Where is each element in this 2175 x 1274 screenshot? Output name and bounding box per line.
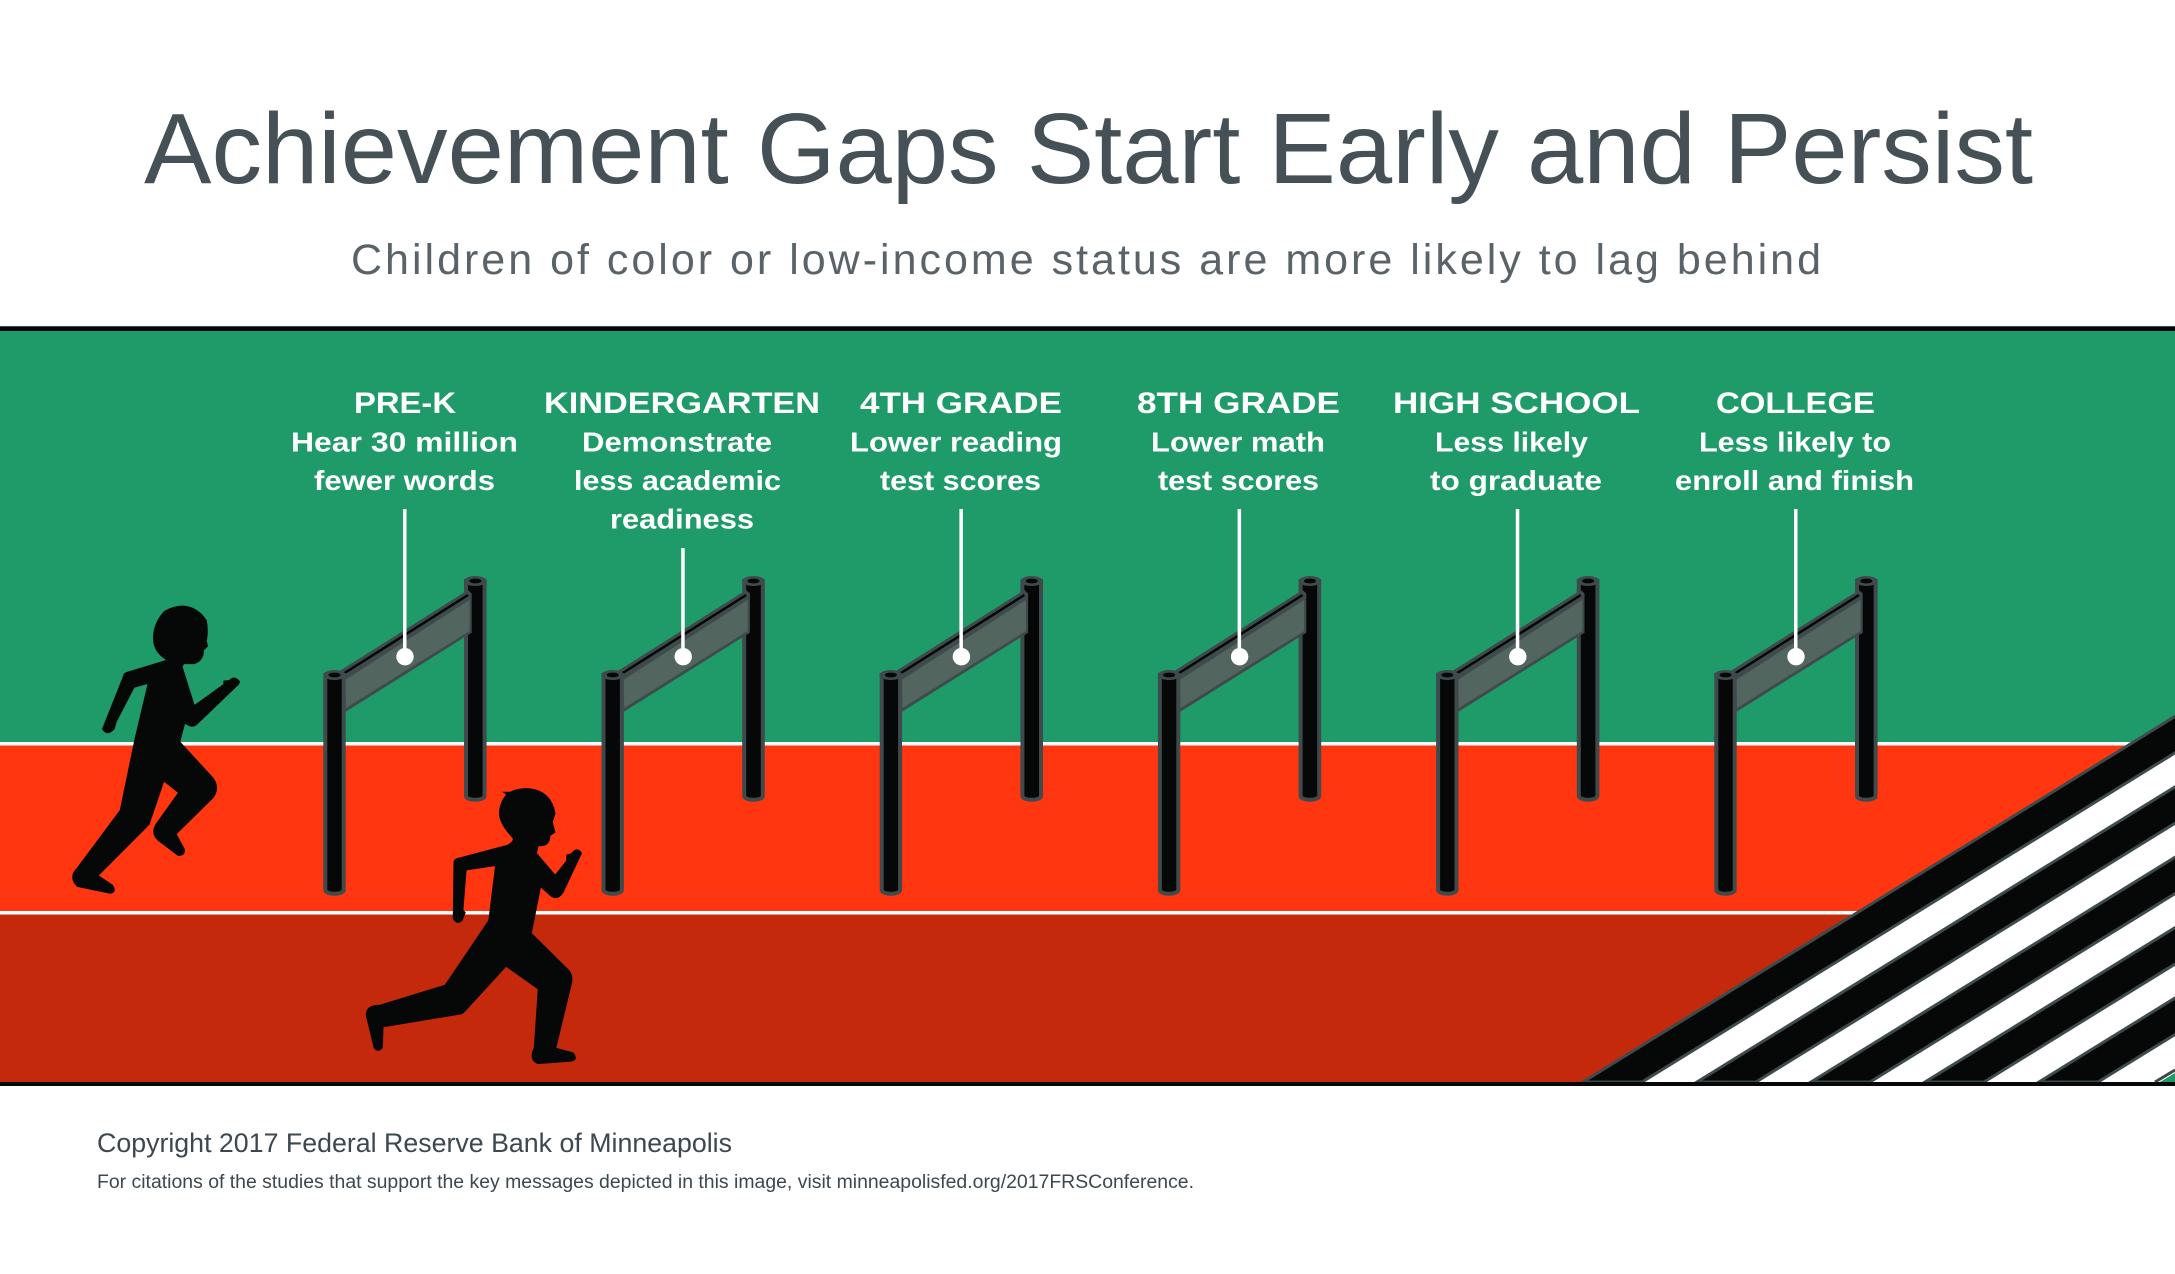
finish ramp with stripes (1500, 588, 2175, 1086)
label: 4th grade: Lower reading (850, 426, 1062, 458)
label: college: COLLEGE (1716, 387, 1875, 420)
label: pre-k: PRE-K (354, 387, 456, 420)
label: 8th grade: 8TH GRADE (1137, 387, 1340, 420)
label: 8th grade: Lower math (1151, 426, 1325, 458)
panel: running track scene (0, 326, 2175, 1086)
hurdle 2 (601, 576, 765, 894)
label: 4th grade (850, 387, 1062, 496)
citation note: For citations of the studies that support the key messages depicted in this image, visit minneapolisfed.org/2017FRSConference. (97, 1172, 1194, 1193)
leader: 8th grade (1231, 509, 1248, 665)
label: college: Less likely to (1699, 426, 1891, 458)
label: pre-k: fewer words (314, 465, 495, 496)
orange track lane (0, 746, 2175, 912)
label: high school: Less likely (1435, 426, 1588, 458)
green field band (0, 331, 2175, 742)
label: kindergarten: Demonstrate (582, 426, 772, 458)
label: college: enroll and finish (1675, 465, 1914, 496)
hurdle 3 (880, 576, 1043, 894)
subtitle: Children of color or low-income status are more likely to lag behind (351, 236, 1821, 284)
label: pre-k (291, 387, 518, 496)
label: pre-k: Hear 30 million (291, 426, 518, 458)
title: Achievement Gaps Start Early and Persist (144, 93, 2033, 205)
copyright line: Copyright 2017 Federal Reserve Bank of Minneapolis (97, 1128, 732, 1158)
leader: college (1787, 509, 1805, 665)
label: kindergarten: KINDERGARTEN (544, 387, 820, 420)
label: kindergarten: less academic (574, 465, 781, 496)
dark red track lane (0, 914, 2175, 1082)
label: high school: to graduate (1430, 465, 1602, 496)
leader: pre-k (396, 509, 414, 665)
hurdle 6 (1714, 576, 1878, 894)
hurdle 1 (323, 576, 487, 894)
label: 8th grade: test scores (1158, 465, 1319, 496)
icon: runner ahead (72, 606, 240, 894)
label: 8th grade (1137, 387, 1340, 496)
label: kindergarten: readiness (610, 504, 754, 534)
label: high school: HIGH SCHOOL (1393, 387, 1640, 420)
label: college (1675, 387, 1914, 496)
label: kindergarten (544, 387, 820, 534)
leader: high school (1509, 509, 1527, 665)
label: high school (1393, 387, 1640, 496)
label: 4th grade: 4TH GRADE (860, 387, 1062, 420)
leader: kindergarten (674, 548, 692, 665)
icon: runner behind (366, 788, 582, 1064)
hurdle 5 (1436, 576, 1599, 894)
label: 4th grade: test scores (880, 465, 1041, 496)
leader: 4th grade (953, 509, 970, 665)
hurdle 4 (1158, 576, 1321, 894)
